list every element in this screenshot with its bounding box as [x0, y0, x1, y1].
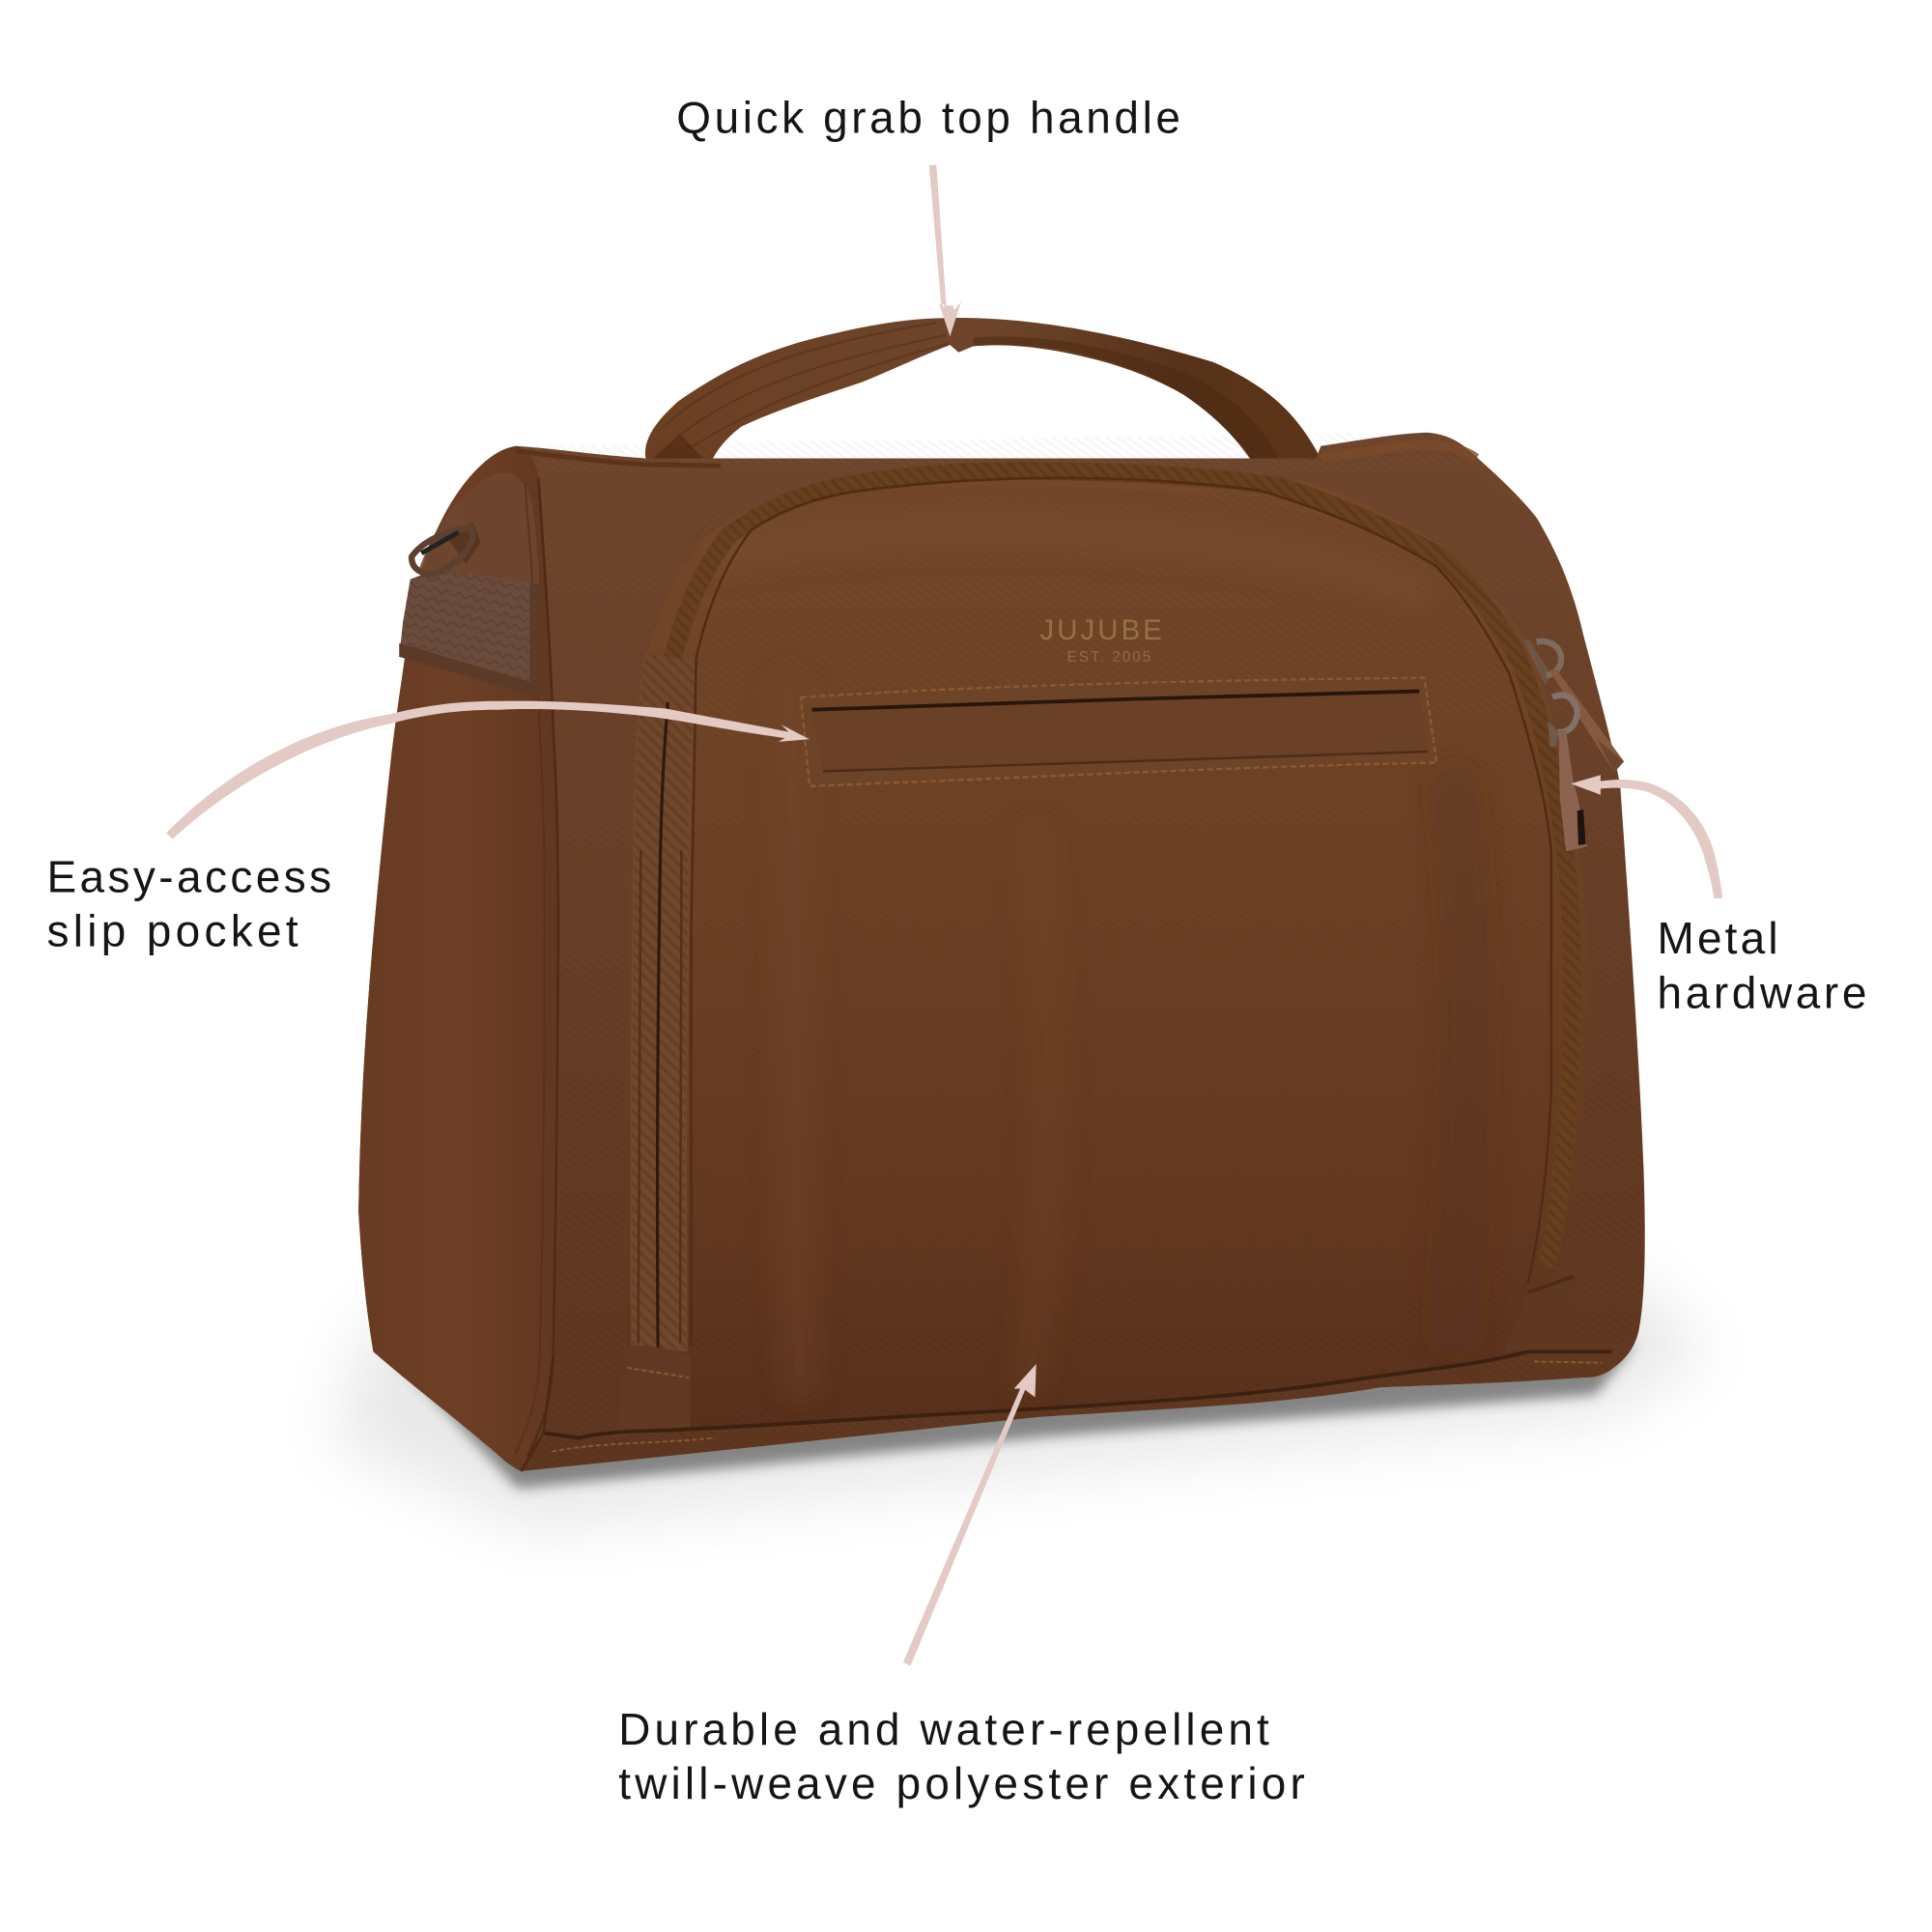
label: metal hardware: hardware	[1658, 967, 1866, 1017]
side strap	[399, 569, 541, 697]
logo: EST. 2005	[1067, 649, 1151, 666]
front panel fabric texture	[692, 491, 1551, 1430]
top edge piping	[516, 444, 1476, 466]
arrow: exterior fabric	[903, 1364, 1037, 1665]
handle	[645, 318, 1321, 470]
label: quick grab top handle: Quick grab top handle	[676, 93, 1180, 143]
slip pocket	[801, 678, 1436, 786]
label: durable exterior: twill-weave polyester exterior	[618, 1758, 1305, 1808]
arrow: metal hardware	[1571, 775, 1722, 898]
side panel	[358, 446, 558, 1471]
label: durable exterior: Durable and water-repellent	[618, 1704, 1269, 1754]
label: easy-access slip pocket: slip pocket	[46, 906, 298, 956]
bottom zipper tabs	[616, 1276, 1574, 1436]
bag illustration	[358, 318, 1645, 1471]
bag body silhouette	[358, 433, 1645, 1471]
bottom seam	[522, 1351, 1611, 1471]
D-ring buckle	[412, 523, 480, 574]
arrow: slip pocket	[166, 701, 810, 839]
label: metal hardware: Metal	[1658, 913, 1778, 963]
front face panel	[627, 465, 1589, 1435]
ground shadow	[332, 1282, 1707, 1528]
label: easy-access slip pocket: Easy-access	[46, 851, 331, 901]
perimeter zipper	[639, 470, 1572, 1351]
logo	[1040, 614, 1162, 666]
zipper pulls: metal hardware	[1523, 639, 1624, 851]
twill texture	[358, 433, 1644, 1471]
fabric sheen folds	[727, 530, 1468, 1380]
arrow: top handle	[929, 165, 961, 336]
logo: JUJUBE	[1040, 614, 1162, 646]
